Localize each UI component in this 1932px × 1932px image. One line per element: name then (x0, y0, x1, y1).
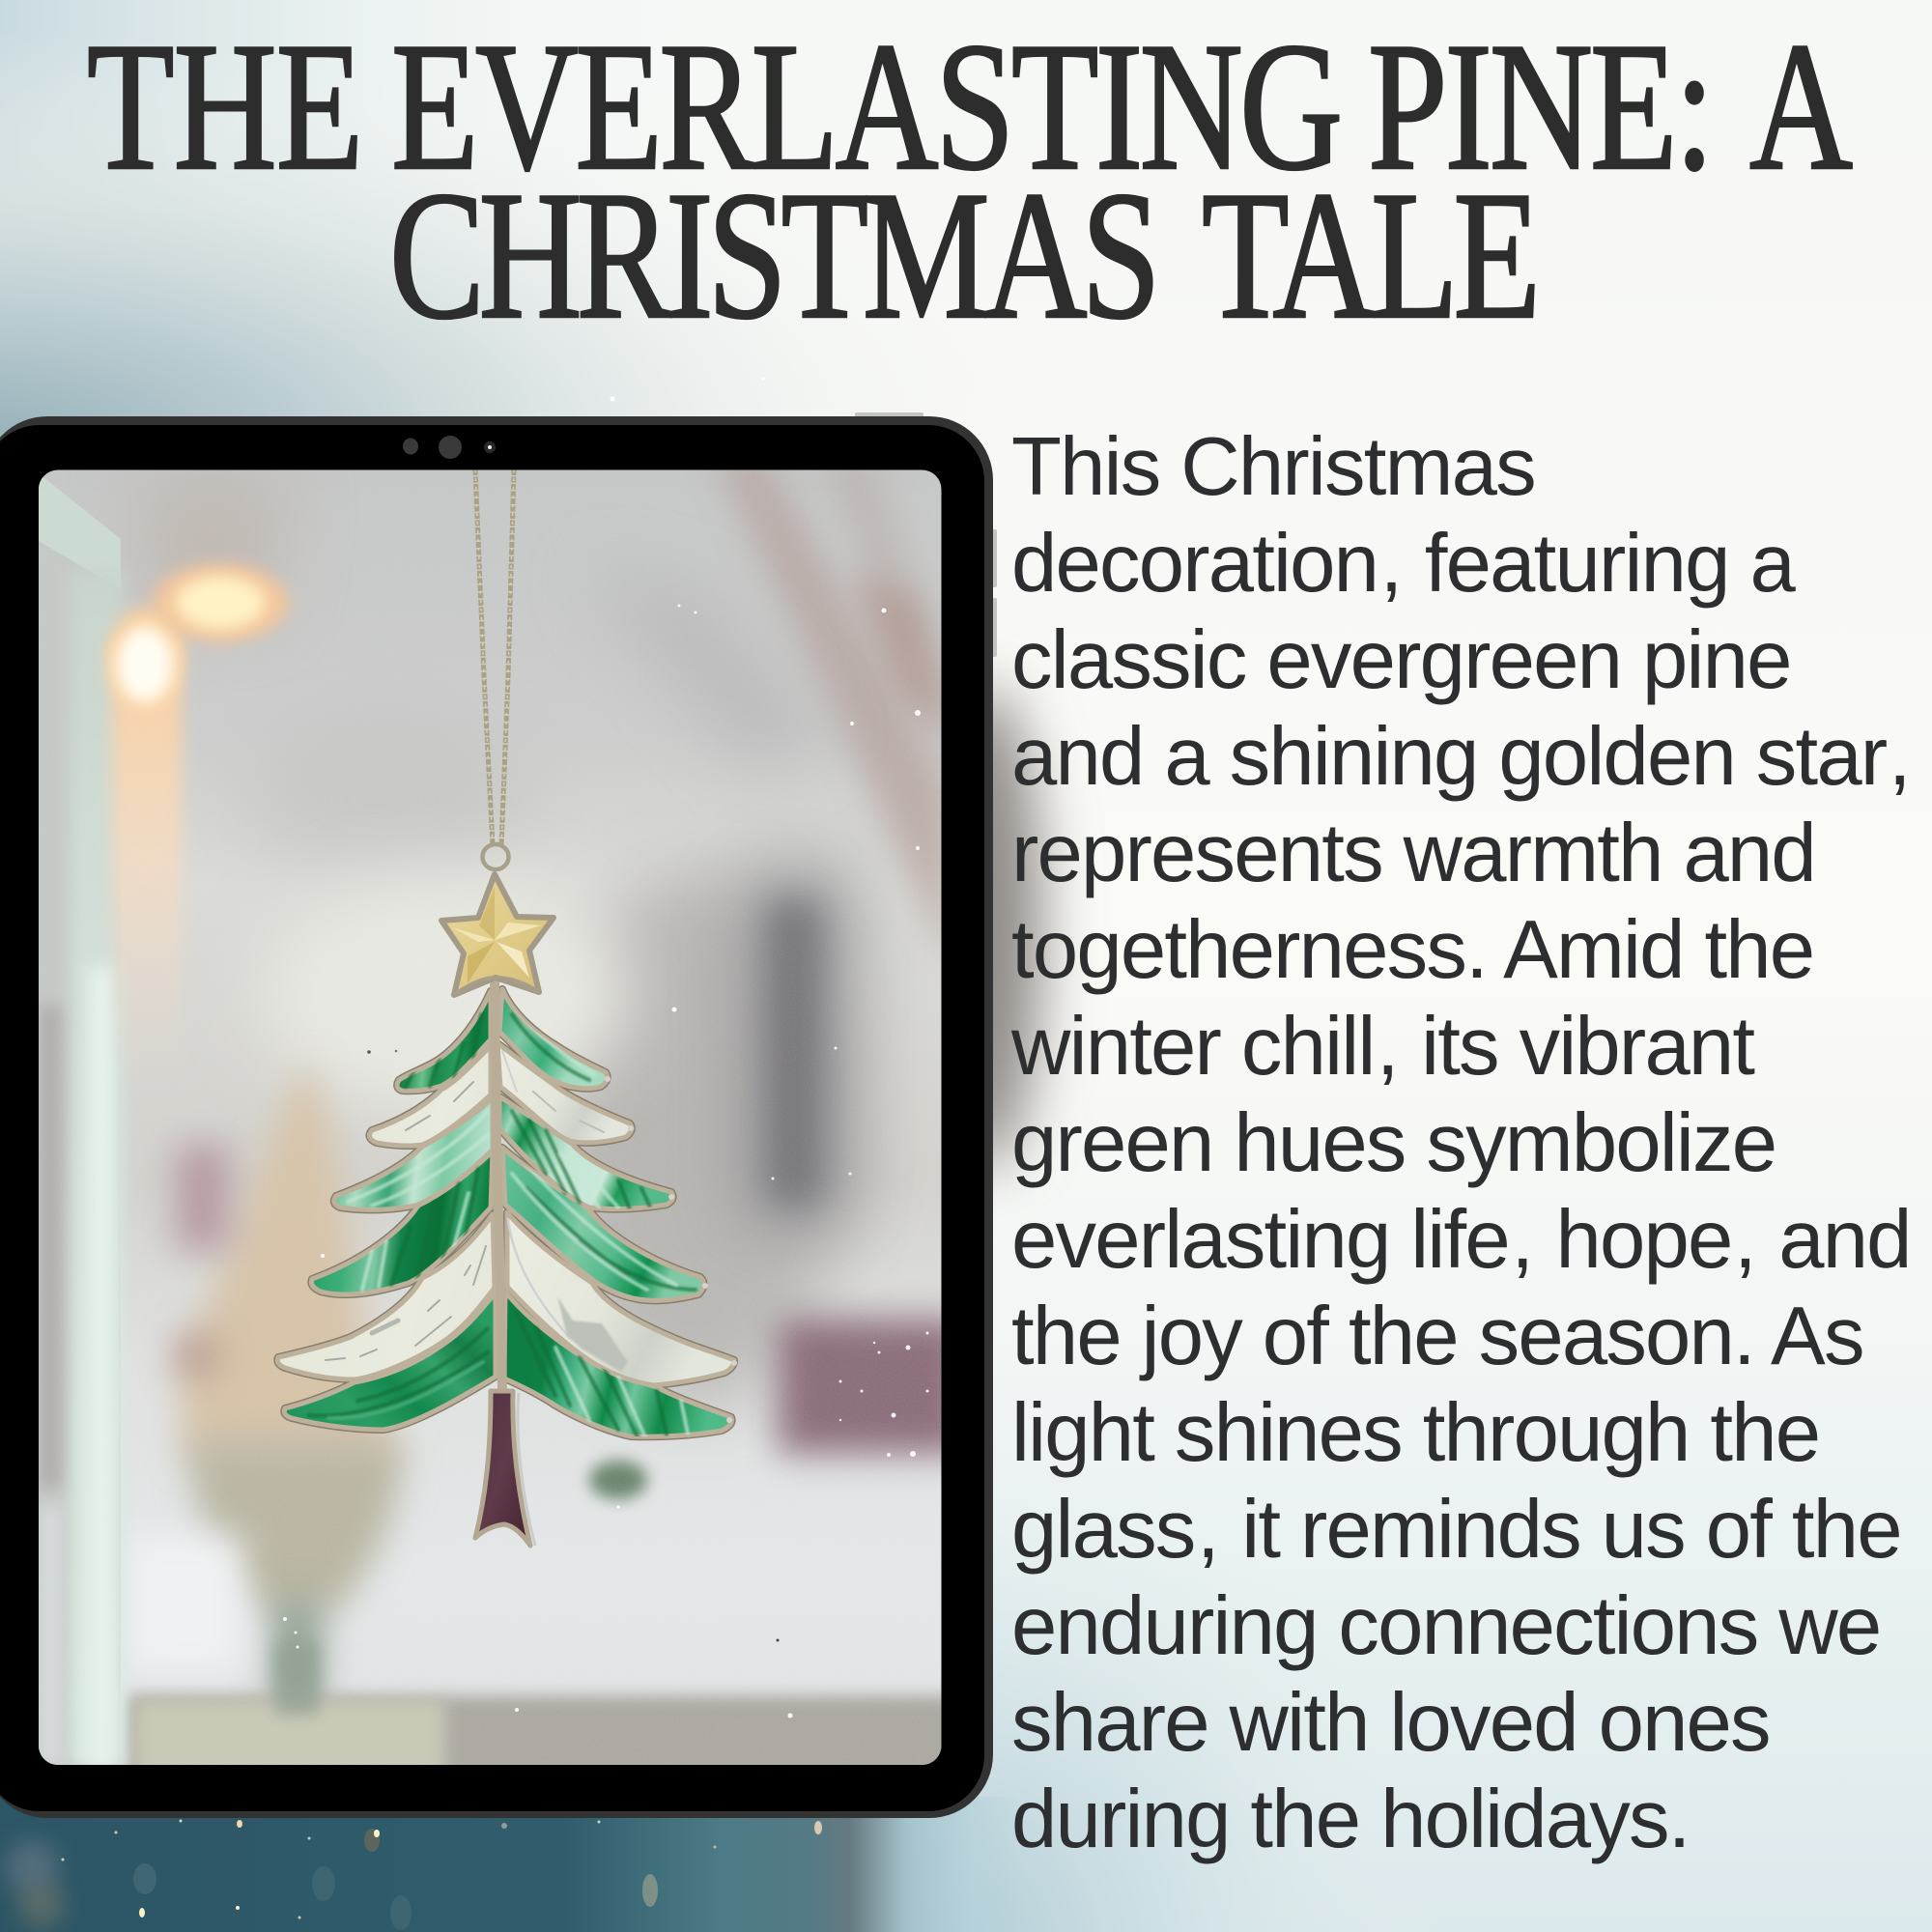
mint window frame (39, 473, 124, 1768)
title: A (1749, 5, 1853, 208)
marbled glass streaks (309, 1009, 696, 1437)
body text (1010, 421, 1911, 1865)
body text: decoration, featuring a (1011, 518, 1794, 610)
body text: glass, it reminds us of the (1011, 1484, 1901, 1576)
trunk (475, 1391, 535, 1546)
grain and snow specks (39, 469, 942, 1766)
body text: the joy of the season. As (1011, 1291, 1863, 1382)
ornament chain (475, 469, 514, 869)
body text: represents warmth and (1011, 808, 1815, 899)
body text: enduring connections we (1011, 1580, 1880, 1672)
title: THE (87, 5, 363, 208)
camera dots (403, 436, 496, 459)
silver tips (605, 1076, 737, 1423)
title: TALE (1202, 154, 1541, 356)
title: EVERLASTING (391, 5, 1343, 208)
body text: winter chill, its vibrant (1011, 1001, 1753, 1093)
tablet body (0, 416, 993, 1818)
stained-glass tree ornament (277, 874, 737, 1546)
title: PINE: (1368, 5, 1715, 208)
body text: This Christmas (1011, 421, 1535, 513)
body text: and a shining golden star, (1011, 711, 1910, 803)
leaded branches group (277, 989, 734, 1436)
screen photo (39, 454, 966, 1787)
tablet with photo of stained-glass ornament (0, 412, 997, 1818)
blurred room backdrop (39, 454, 966, 1787)
body text: everlasting life, hope, and (1011, 1194, 1911, 1286)
warm bokeh lights (108, 564, 288, 1082)
body text: togetherness. Amid the (1011, 904, 1813, 996)
body text: classic evergreen pine (1011, 614, 1791, 706)
central stem (495, 978, 502, 1391)
body text: green hues symbolize (1011, 1097, 1776, 1189)
body text: share with loved ones (1011, 1677, 1770, 1769)
glass texture marks (326, 1051, 628, 1372)
tablet side buttons (855, 412, 997, 657)
body text: light shines through the (1011, 1387, 1819, 1479)
title: CHRISTMAS (389, 154, 1161, 356)
gold star (441, 874, 554, 995)
gold bokeh specks (5, 377, 822, 1930)
body text: during the holidays. (1011, 1774, 1690, 1865)
